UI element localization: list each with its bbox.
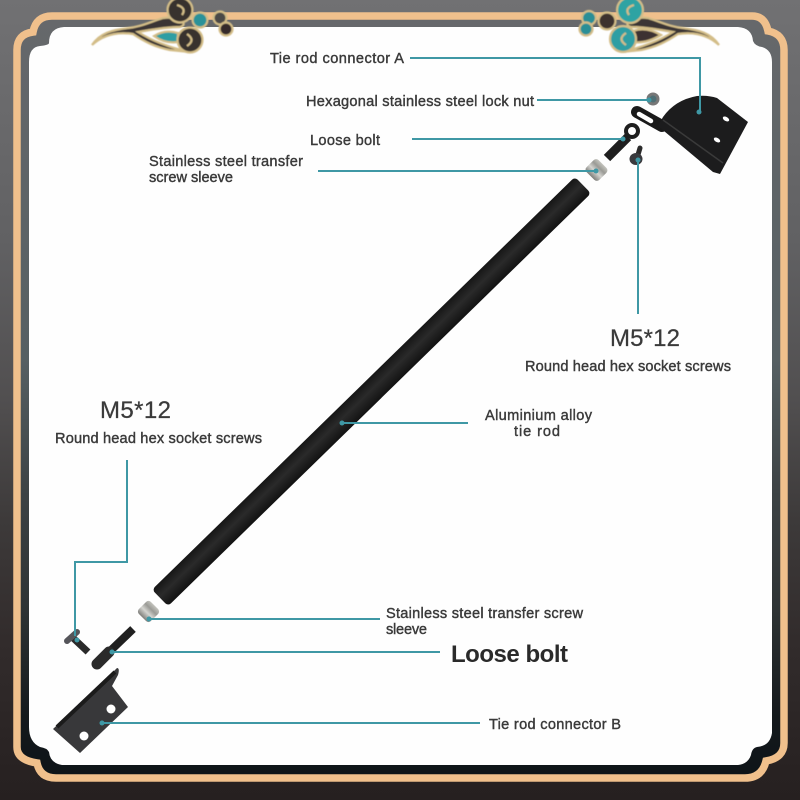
label: lower M5*12: M5*12 (100, 397, 171, 424)
label: lower screw description: Round head hex socket screws (55, 431, 262, 447)
label: upper M5*12: M5*12 (610, 325, 680, 352)
label: upper transfer sleeve: screw sleeve (149, 170, 233, 186)
leader line: connector A (410, 58, 702, 114)
leader line: lock nut (537, 98, 652, 102)
connector B bracket (53, 668, 128, 753)
bracket A slotted tab (637, 112, 662, 126)
bracket B holes (80, 704, 116, 740)
upper loose bolt (607, 125, 638, 158)
connector A bracket (637, 96, 748, 174)
leader line: lower sleeve (146, 616, 380, 622)
label: upper transfer sleeve: Stainless steel transfer (149, 154, 303, 170)
label: aluminium alloy tie rod (485, 408, 593, 440)
label: aluminium alloy tie rod: Aluminium alloy (485, 408, 593, 424)
label: upper screw description: Round head hex socket screws (525, 359, 731, 375)
upper screw (630, 148, 642, 165)
label: lock nut: Hexagonal stainless steel lock nut (306, 94, 534, 110)
aluminium alloy tie rod (152, 177, 591, 606)
bracket B fold (57, 672, 115, 727)
bracket A fold (663, 120, 723, 163)
label: lower transfer sleeve (386, 606, 583, 638)
leader line: upper sleeve (318, 168, 598, 174)
leader line: lower screw (74, 460, 127, 642)
label: loose bolt lower: Loose bolt (451, 641, 568, 668)
label: tie rod connector B: Tie rod connector B (489, 717, 621, 733)
upper steel sleeve (584, 158, 609, 182)
label: lower transfer sleeve: sleeve (386, 622, 427, 638)
bracket A slot (639, 114, 651, 121)
leader line: upper screw (636, 158, 640, 314)
leader line: connector B (100, 720, 480, 726)
hexagonal lock nut (648, 94, 658, 104)
label: aluminium alloy tie rod: tie rod (514, 424, 560, 440)
bracket A plate (658, 96, 748, 174)
lower screw (67, 632, 88, 652)
label: lower transfer sleeve: Stainless steel transfer screw (386, 606, 583, 622)
label: upper transfer sleeve (149, 154, 303, 186)
label: tie rod connector A: Tie rod connector A (270, 51, 404, 67)
lower loose bolt (97, 629, 133, 664)
label: loose bolt upper: Loose bolt (310, 133, 380, 149)
bracket B plate (53, 668, 128, 753)
leader line: upper loose bolt (412, 136, 626, 142)
ornament: right cloud (580, 0, 719, 52)
lower steel sleeve (136, 599, 161, 624)
leader line: lower loose bolt (110, 650, 440, 654)
leader line: tie rod (340, 420, 468, 426)
bracket A holes (713, 116, 730, 143)
ornament: left cloud (92, 0, 232, 52)
